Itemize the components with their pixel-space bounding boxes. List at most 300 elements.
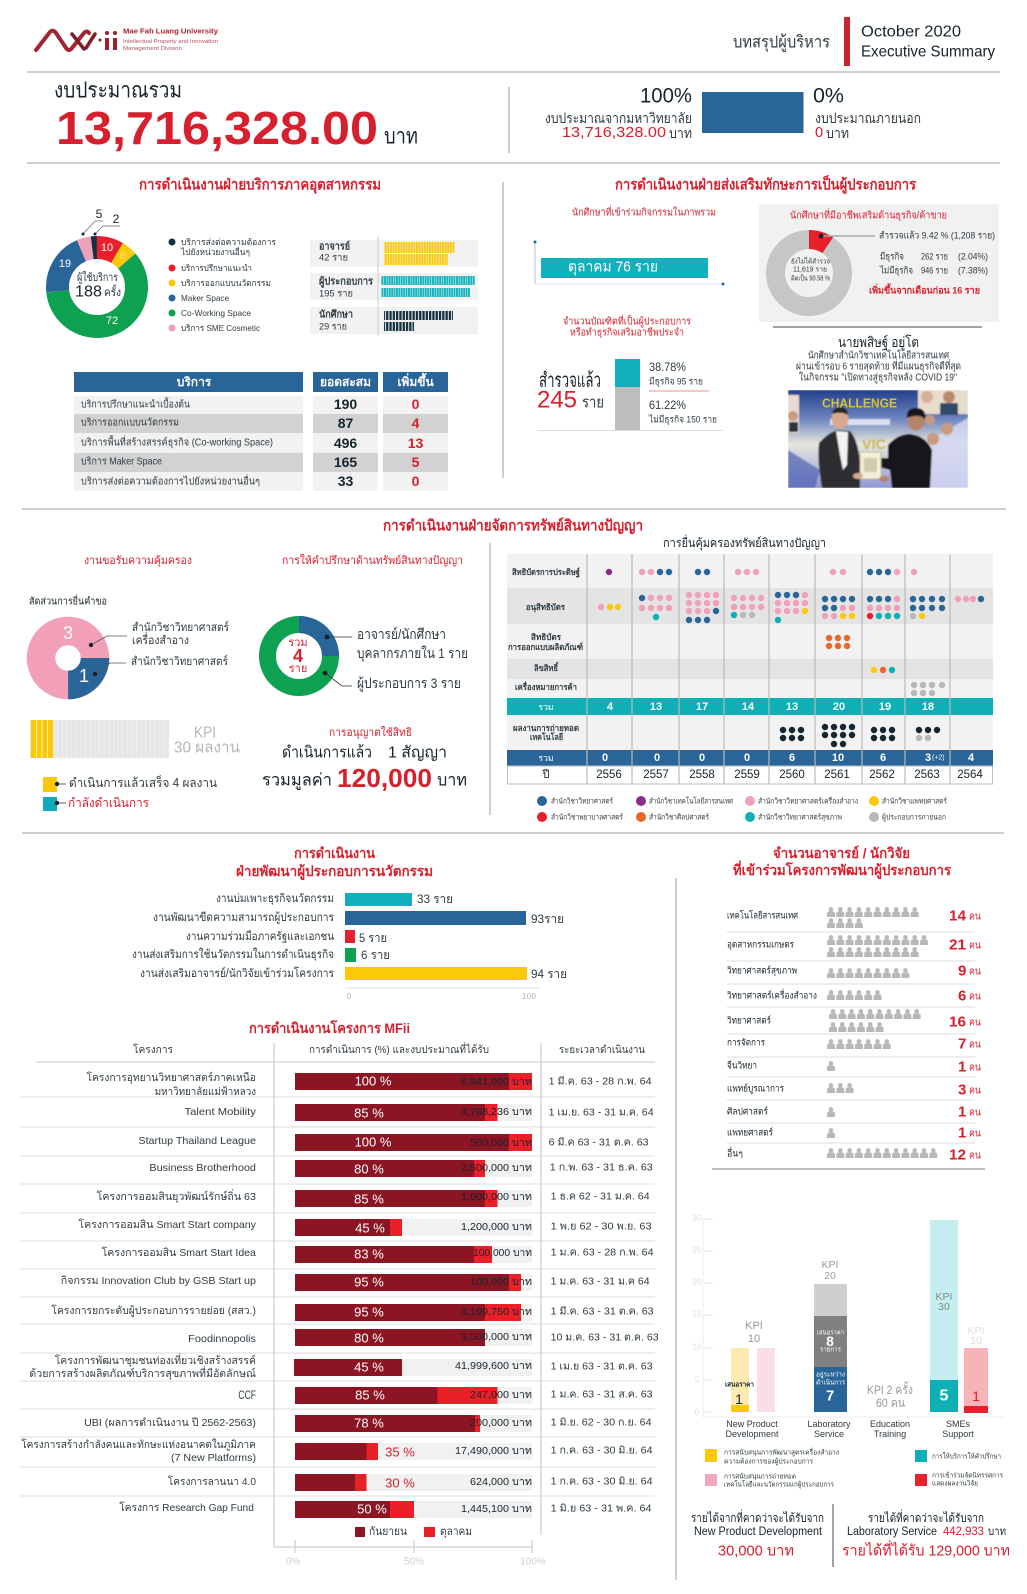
- school names: วิทยาศาสตร์: [726, 1014, 771, 1026]
- chart: IP filings by year: [507, 534, 993, 822]
- logo: [36, 28, 218, 52]
- project labels: UBI (ผลการดำเนินงาน ปี 2562-2563): [84, 1416, 256, 1429]
- services table: ยอดสะสม: [320, 375, 371, 389]
- total budget: 13,716,328.00: [56, 102, 378, 154]
- axes: 0: [695, 1408, 700, 1416]
- services table: 4: [412, 415, 420, 431]
- services table: บริการ: [177, 375, 212, 389]
- project dates: 1 ม.ค. 63 - 28 ก.พ. 64: [551, 1248, 654, 1258]
- totals row: transfers: (+2): [932, 754, 945, 762]
- donut legend: บริการส่งต่อความต้องการ: [181, 237, 276, 247]
- pie chart: application share: สำนักวิชาวิทยาศาสตร์: [131, 654, 228, 668]
- row labels: ลิขสิทธิ์: [534, 661, 559, 673]
- school legend: สำนักวิชาวิทยาศาสตร์สุขภาพ: [758, 812, 842, 822]
- KPI progress strip: [30, 720, 240, 758]
- pie chart: application share: 1: [79, 666, 89, 686]
- panel: industrial services: [41, 176, 478, 491]
- headcounts: 9: [958, 962, 966, 980]
- heading: ฝ่ายพัฒนาผู้ประกอบการนวัตกรรม: [236, 863, 433, 880]
- bars: SMEs Support: KPI: [968, 1325, 984, 1337]
- donut chart: 19: [59, 258, 71, 270]
- school legend: สำนักวิชาเทคโนโลยีสารสนเทศ: [649, 796, 733, 806]
- table header: [133, 1042, 645, 1056]
- headcounts: คน: [969, 1128, 981, 1140]
- totals row: transfers: 10: [832, 752, 844, 764]
- heading: [733, 845, 951, 879]
- subheading: consulting: การให้คำปรึกษาด้านทรัพย์สินทางปัญญา: [282, 554, 463, 567]
- totals row: filings: 17: [696, 701, 708, 713]
- bars: Laboratory Service: รายการ: [820, 1346, 841, 1354]
- bar chart: งานส่งเสริมการใช้นวัตกรรมในการดำเนินธุรกิจ: [132, 948, 334, 961]
- headcounts: [949, 908, 981, 1164]
- project labels: โครงการออมสินยุวพัฒน์รักษ์ถิ่น 63: [97, 1189, 256, 1203]
- donut chart: consulting: บุคลากรภายใน 1 ราย: [357, 645, 468, 662]
- licensing: ดำเนินการแล้ว: [282, 744, 372, 762]
- progress percentages: 80 %: [354, 1330, 384, 1346]
- totals row: transfers: 0: [602, 752, 608, 764]
- headcounts: คน: [969, 940, 981, 952]
- student spotlight: ในกิจกรรม "เปิดทางสู่ธุรกิจหลัง COVID 19": [799, 372, 957, 384]
- progress percentages: 100 %: [355, 1134, 392, 1150]
- heading: การดำเนินงาน: [294, 845, 375, 861]
- totals row: transfers: 0: [744, 752, 750, 764]
- school legend: สำนักวิชาวิทยาศาสตร์เครื่องสำอาง: [758, 796, 858, 806]
- project budgets: 41,999,600 บาท: [455, 1360, 532, 1372]
- project labels: (7 New Platforms): [171, 1452, 256, 1464]
- donut chart: consulting: ผู้ประกอบการ 3 ราย: [357, 675, 461, 692]
- school names: เทคโนโลยีสารสนเทศ: [727, 910, 798, 922]
- donut chart: 72: [106, 315, 118, 327]
- panel: students with side business: เพิ่มขึ้นจากเดือนก่อน 16 ราย: [869, 282, 980, 296]
- school names: แพทยศาสตร์: [727, 1126, 773, 1138]
- totals row: filings: [607, 701, 934, 713]
- budget split: บาท: [669, 125, 692, 141]
- project dates: 1 ก.พ. 63 - 31 ธ.ค. 63: [550, 1162, 653, 1174]
- project budgets: 1,000,000 บาท: [461, 1191, 532, 1203]
- panel: students with side business: [759, 204, 999, 322]
- panel: students with side business: 11,619 ราย: [793, 266, 827, 274]
- panel: students with side business: ไม่มีธุรกิจ: [879, 264, 913, 276]
- donut chart: consulting: ราย: [289, 663, 307, 675]
- project dates: 1 มี.ค. 63 - 28 ก.พ. 64: [549, 1076, 652, 1088]
- donut chart: 188: [75, 284, 102, 300]
- chart: service KPI: [693, 1214, 1005, 1488]
- month legend: กันยายน: [369, 1526, 407, 1538]
- label: Education Training: 60 คน: [876, 1396, 905, 1410]
- project budgets: 17,490,000 บาท: [455, 1445, 532, 1457]
- headcounts: คน: [969, 912, 981, 922]
- school legend: สำนักวิชาวิทยาศาสตร์: [551, 796, 613, 806]
- row labels: เทคโนโลยี: [530, 732, 563, 742]
- percent axis: 100%: [520, 1556, 546, 1568]
- revenue: Laboratory Service: 442,933: [943, 1526, 984, 1538]
- logo: Mae Fah Luang University: [123, 28, 218, 36]
- donut leader labels: [82, 207, 120, 236]
- headcounts: คน: [969, 1018, 981, 1028]
- donut legend: [168, 237, 276, 333]
- services table: บริการพื้นที่สร้างสรรค์ธุรกิจ (Co-working Space): [81, 434, 273, 448]
- years row: 2562: [869, 769, 895, 781]
- subheading: graduates: จำนวนบัณฑิตที่เป็นผู้ประกอบการ: [563, 314, 692, 328]
- chart legend: ความต้องการของผู้ประกอบการ: [724, 1458, 813, 1466]
- person icons: [827, 907, 937, 1158]
- donut chart: [41, 231, 153, 343]
- budget split: 100%: [640, 84, 692, 108]
- chart legend: [705, 1448, 1003, 1488]
- pie chart: application share: สัดส่วนการยื่นคำขอ: [29, 594, 107, 608]
- bars: Laboratory Service: ดำเนินการ: [816, 1378, 845, 1386]
- progress percentages: 85 %: [354, 1106, 384, 1120]
- totals row: transfers: 6: [880, 752, 886, 764]
- totals row: filings: 14: [742, 701, 755, 713]
- subheading: protection: งานขอรับความคุ้มครอง: [84, 555, 192, 567]
- bars: Laboratory Service: อยู่ระหว่าง: [816, 1372, 845, 1378]
- headcounts: คน: [969, 1086, 981, 1096]
- report title: บทสรุปผู้บริหาร: [733, 32, 830, 52]
- project dates: 1 ก.ค. 63 - 30 มิ.ย. 64: [551, 1446, 653, 1456]
- headcounts: คน: [969, 966, 981, 978]
- donut chart: 10: [101, 242, 113, 254]
- headcounts: คน: [969, 1150, 981, 1162]
- revenue: New Product Development: [691, 1509, 824, 1560]
- bar chart: งานบ่มเพาะธุรกิจนวัตกรรม: [216, 892, 334, 905]
- school legend: สำนักวิชาแพทยศาสตร์: [882, 796, 947, 806]
- bar chart: 93ราย: [531, 912, 564, 926]
- axes: 20: [693, 1278, 702, 1286]
- graduate survey chart: 245: [537, 386, 577, 414]
- bars: Laboratory Service: [814, 1259, 847, 1412]
- school names: วิทยาศาสตร์เครื่องสำอาง: [726, 988, 817, 1002]
- row labels: สิทธิบัตร: [531, 632, 561, 642]
- donut chart: ครั้ง: [104, 284, 121, 299]
- budget split: บาท: [826, 125, 849, 141]
- bar chart: งานความร่วมมือภาครัฐและเอกชน: [186, 930, 334, 943]
- project dates: 6 มี.ค 63 - 31 ต.ค. 63: [549, 1136, 649, 1148]
- school names: แพทย์บูรณาการ: [727, 1082, 784, 1094]
- heading: จำนวนอาจารย์ / นักวิจัย: [773, 845, 910, 861]
- label: Education Training: [867, 1381, 913, 1410]
- subheading: overall activity: นักศึกษาที่เข้าร่วมกิจกรรมในภาพรวม: [572, 204, 716, 218]
- user type bars: ผู้ประกอบการ: [319, 276, 374, 288]
- years row: 2560: [779, 769, 805, 781]
- school names: [726, 910, 817, 1160]
- project dates: 1 เม.ย. 63 - 31 ม.ค. 64: [549, 1108, 654, 1118]
- chart legend: การสนับสนุนการถ่ายทอด: [724, 1472, 796, 1480]
- years row: 2556: [596, 769, 622, 781]
- panel: entrepreneurship skills: [534, 174, 999, 488]
- table rules: [20, 1043, 655, 1547]
- bars: SMEs Support: 10: [970, 1335, 982, 1347]
- school names: วิทยาศาสตร์สุขภาพ: [726, 964, 797, 976]
- licensing: 1 สัญญา: [388, 744, 447, 762]
- project budgets: 1,445,100 บาท: [461, 1503, 532, 1515]
- project budgets: 1,200,000 บาท: [461, 1221, 532, 1233]
- services table: 87: [338, 415, 353, 431]
- project dates: 1 มี.ค. 63 - 31 ต.ค. 63: [551, 1306, 654, 1318]
- donut chart: consulting: รวม: [288, 637, 308, 649]
- red accent bar: [844, 17, 850, 66]
- headcounts: 7: [958, 1036, 966, 1052]
- school names: การจัดการ: [727, 1038, 765, 1048]
- user type bars: [310, 236, 478, 336]
- percent axis: 0%: [286, 1556, 300, 1568]
- headcounts: คน: [969, 1040, 981, 1050]
- project budgets: 2,500,000 บาท: [461, 1162, 532, 1174]
- licensing: 120,000: [337, 763, 432, 793]
- donut chart: ผู้ใช้บริการ: [77, 271, 118, 284]
- project budgets: 100,000 บาท: [473, 1247, 532, 1259]
- graduate survey chart: ราย: [582, 394, 604, 412]
- project budgets: 247,000 บาท: [470, 1389, 532, 1401]
- chart title: การยื่นคุ้มครองทรัพย์สินทางปัญญา: [663, 534, 826, 551]
- bar chart: 5 ราย: [359, 931, 387, 945]
- progress percentages: 83 %: [354, 1246, 384, 1262]
- school legend: สำนักวิชาศิลปศาสตร์: [649, 812, 709, 822]
- project labels: โครงการออมสิน Smart Start company: [78, 1218, 257, 1231]
- panel: students with side business: 946 ราย: [921, 266, 948, 276]
- project dates: 1 ก.ค. 63 - 30 มิ.ย. 64: [551, 1476, 653, 1488]
- heading: การดำเนินงานโครงการ MFii: [249, 1019, 410, 1036]
- bars: New Product Development: เสนอราคา: [725, 1382, 754, 1388]
- licensing: [262, 726, 467, 793]
- donut chart: consulting: [268, 624, 468, 692]
- years row: 2564: [957, 769, 983, 781]
- category labels: [725, 1419, 974, 1439]
- row rules: [712, 932, 985, 1169]
- heading: [236, 845, 433, 880]
- panel: students with side business: นักศึกษาที่มีอาชีพเสริมด้านธุรกิจ/ค้าขาย: [790, 208, 947, 222]
- budget split: 0: [815, 125, 823, 141]
- totals row: transfers: 0: [699, 752, 705, 764]
- row labels: รวม: [539, 702, 553, 712]
- pie chart: application share: สำนักวิชาวิทยาศาสตร์: [132, 620, 229, 634]
- budget split: 13,716,328.00: [562, 125, 666, 141]
- services table: บริการออกแบบนวัตกรรม: [81, 418, 179, 428]
- project labels: โครงการพัฒนาชุมชนท่องเที่ยวเชิงสร้างสรรค์: [55, 1353, 256, 1367]
- chart legend: แสดงผลงานวิจัย: [932, 1480, 978, 1488]
- project budgets: 500,000 บาท: [470, 1137, 532, 1149]
- graduate survey chart: ไม่มีธุรกิจ 150 ราย: [648, 414, 717, 426]
- headcounts: คน: [969, 1062, 981, 1074]
- label: Education Training: KPI 2 ครั้ง: [867, 1381, 913, 1397]
- project dates: 1 ม.ค. 63 - 31 ส.ค. 63: [551, 1390, 653, 1400]
- graduate survey chart: สำรวจแล้ว: [539, 370, 601, 392]
- project budgets: 3,500,000 บาท: [461, 1331, 532, 1343]
- bar chart: [132, 892, 567, 1001]
- school names: จีนวิทยา: [727, 1060, 757, 1072]
- KPI progress strip: 30 ผลงาน: [174, 740, 240, 756]
- graduate survey chart: 61.22%: [649, 398, 686, 412]
- donut leader labels: 5: [96, 207, 103, 221]
- budget split: งบประมาณภายนอก: [815, 110, 921, 126]
- category labels: Service: [814, 1429, 844, 1439]
- project budgets: 624,000 บาท: [470, 1476, 532, 1488]
- services table: 5: [412, 454, 420, 470]
- row labels: ผลงานการถ่ายทอด: [513, 723, 579, 733]
- bars: New Product Development: 1: [735, 1391, 743, 1407]
- user type bars: 195 ราย: [319, 288, 353, 300]
- panel: students with side business: (2.04%): [958, 252, 988, 262]
- chart legend: เทคโนโลยีและนวัตกรรมแก่ผู้ประกอบการ: [724, 1480, 834, 1488]
- table header: การดำเนินการ (%) และงบประมาณที่ได้รับ: [309, 1042, 489, 1056]
- progress percentages: [354, 1074, 415, 1516]
- school legend: ผู้ประกอบการภายนอก: [882, 812, 946, 822]
- school legend: สำนักวิชาพยาบาลศาสตร์: [551, 812, 623, 822]
- category labels: New Product: [726, 1419, 778, 1429]
- services table: บริการ Maker Space: [81, 456, 162, 468]
- donut chart: consulting: 4: [293, 646, 303, 666]
- progress bars: [294, 1073, 532, 1518]
- years row: 2563: [914, 769, 940, 781]
- donut legend: บริการออกแบบนวัตกรรม: [181, 278, 271, 288]
- panel: faculty participation: [712, 845, 985, 1169]
- percent axis: 50%: [404, 1556, 424, 1568]
- project labels: Talent Mobility: [184, 1106, 257, 1118]
- chart legend: การให้บริการให้คำปรึกษา: [932, 1452, 1001, 1460]
- axes: [693, 1214, 1005, 1417]
- services table: [74, 372, 448, 491]
- row labels: อนุสิทธิบัตร: [526, 602, 565, 613]
- axes: 15: [693, 1310, 702, 1318]
- bars: New Product Development: 10: [748, 1333, 760, 1345]
- revenue: Laboratory Service: รายได้ที่คาดว่าจะได้รับจาก: [868, 1509, 984, 1525]
- progress percentages: 85 %: [355, 1388, 385, 1402]
- project labels: โครงการออมสิน Smart Start Idea: [102, 1246, 256, 1259]
- headcounts: คน: [969, 992, 981, 1002]
- row labels: ปี: [541, 768, 550, 781]
- progress percentages: 50 %: [357, 1502, 387, 1516]
- user type bars: นักศึกษา: [319, 308, 353, 320]
- headcounts: 21: [949, 936, 966, 954]
- student spotlight: ผ่านเข้ารอบ 6 รายสุดท้าย ที่มีแผนธุรกิจดีที่สุด: [796, 358, 961, 372]
- donut legend: Co-Working Space: [181, 308, 251, 318]
- student spotlight: นายพสิษฐ์ อยู่โต: [838, 334, 919, 351]
- photo: award presentation: CHALLENGE: [822, 396, 897, 410]
- bars: SMEs Support: KPI: [936, 1291, 952, 1303]
- logo: Intellectual Property and Innovation: [123, 39, 218, 45]
- headcounts: 1: [958, 1058, 966, 1076]
- panel: IP management: [29, 516, 643, 811]
- bar chart: 33 ราย: [417, 892, 453, 906]
- user type bars: 42 ราย: [319, 252, 348, 264]
- total budget: งบประมาณรวม: [54, 78, 182, 102]
- years row: 2558: [689, 769, 715, 781]
- bar: October participants: ตุลาคม 76 ราย: [568, 258, 658, 276]
- donut legend: ไปยังหน่วยงานอื่นๆ: [180, 246, 250, 257]
- project dates: [549, 1076, 659, 1514]
- heading: การดำเนินงานฝ่ายจัดการทรัพย์สินทางปัญญา: [383, 516, 643, 534]
- chart legend: การเข้าร่วมจัดนิทรรศการ: [932, 1472, 1003, 1480]
- services table: 33: [338, 473, 353, 489]
- project budgets: 200,000 บาท: [470, 1417, 532, 1429]
- school names: อุตสาหกรรมเกษตร: [727, 940, 794, 950]
- budget split: 0%: [813, 84, 844, 108]
- bar chart: งานส่งเสริมอาจารย์/นักวิจัยเข้าร่วมโครงการ: [140, 966, 334, 980]
- photo: award presentation: VIC: [862, 436, 886, 452]
- axes: 5: [695, 1376, 700, 1384]
- totals row: filings: 13: [786, 701, 798, 713]
- totals row: filings: 19: [879, 701, 891, 713]
- years row: 2559: [734, 769, 760, 781]
- table header: ระยะเวลาดำเนินงาน: [559, 1044, 645, 1056]
- progress percentages: 78 %: [354, 1416, 384, 1430]
- bar chart: 0: [347, 991, 352, 1001]
- progress percentages: 85 %: [354, 1192, 384, 1206]
- panel: students with side business: คิดเป็น 90.58 %: [791, 274, 830, 282]
- years row: 2557: [643, 769, 669, 781]
- licensing: รวมมูลค่า: [262, 770, 332, 790]
- project dates: 1 เม.ย 63 - 31 ต.ค. 63: [551, 1362, 653, 1372]
- headcounts: 1: [958, 1104, 966, 1120]
- services table: 496: [334, 435, 357, 451]
- project budgets: 6,941,000 บาท: [461, 1076, 532, 1088]
- revenue: Laboratory Service: บาท: [988, 1526, 1006, 1538]
- services table: 0: [412, 473, 420, 489]
- pie chart: application share: เครื่องสำอาง: [132, 632, 189, 647]
- bars: SMEs Support: [930, 1220, 988, 1413]
- project labels: โครงการลานนา 4.0: [168, 1475, 256, 1488]
- progress percentages: 45 %: [354, 1360, 384, 1374]
- row labels: การออกแบบผลิตภัณฑ์: [508, 642, 583, 652]
- heading: การดำเนินงานฝ่ายส่งเสริมทักษะการเป็นผู้ประกอบการ: [615, 174, 917, 194]
- bar chart: 6 ราย: [361, 948, 390, 962]
- budget split: [545, 84, 921, 141]
- bars: SMEs Support: 1: [972, 1388, 980, 1404]
- project labels: โครงการยกระดับผู้ประกอบการรายย่อย (สสว.): [51, 1304, 256, 1317]
- donut chart: consulting: อาจารย์/นักศึกษา: [357, 626, 446, 642]
- budget split: งบประมาณจากมหาวิทยาลัย: [545, 110, 692, 126]
- panel: students with side business: (7.38%): [958, 266, 988, 276]
- panel: students with side business: ยังไม่ได้สำรวจ: [791, 256, 830, 266]
- services table: เพิ่มขึ้น: [397, 372, 434, 389]
- category labels: Support: [942, 1429, 974, 1439]
- panel: students with side business: 262 ราย: [921, 252, 948, 262]
- project labels: มหาวิทยาลัยแม่ฟ้าหลวง: [155, 1086, 256, 1098]
- panel: innovation entrepreneur development: [132, 845, 567, 1001]
- project labels: โครงการ Research Gap Fund: [119, 1501, 254, 1514]
- table header: โครงการ: [133, 1043, 173, 1056]
- bar chart: งานพัฒนาขีดความสามารถผู้ประกอบการ: [153, 911, 334, 924]
- headcounts: 6: [958, 988, 966, 1004]
- month legend: [355, 1526, 472, 1538]
- totals row: filings: 13: [650, 701, 662, 713]
- axes: 30: [693, 1214, 702, 1222]
- donut leader labels: 2: [113, 212, 120, 226]
- logo: Management Division: [123, 46, 182, 52]
- headcounts: 16: [949, 1014, 966, 1030]
- graduate survey chart: มีธุรกิจ 95 ราย: [649, 376, 703, 388]
- years row: [596, 769, 983, 781]
- progress percentages: 35 %: [385, 1444, 415, 1460]
- pie chart: application share: [29, 594, 229, 686]
- headcounts: 1: [958, 1124, 966, 1142]
- years row: 2561: [824, 769, 850, 781]
- project budgets: 4,768,236 บาท: [461, 1106, 532, 1118]
- bars: SMEs Support: 30: [938, 1301, 950, 1313]
- bar: October participants: [534, 240, 724, 286]
- bar chart: 100: [522, 991, 536, 1001]
- report date: Executive Summary: [861, 44, 995, 60]
- donut chart: 6: [120, 250, 126, 262]
- headcounts: 3: [958, 1082, 966, 1098]
- grid rows: [507, 554, 993, 784]
- category labels: Training: [874, 1429, 906, 1439]
- project dates: 1 พ.ย 62 - 30 พ.ย. 63: [551, 1222, 652, 1232]
- panel: students with side business: สำรวจแล้ว 9.42 % (1,208 ราย): [879, 230, 995, 242]
- graduate survey chart: [537, 359, 723, 430]
- totals row: transfers: 0: [654, 752, 660, 764]
- services table: 13: [408, 435, 423, 451]
